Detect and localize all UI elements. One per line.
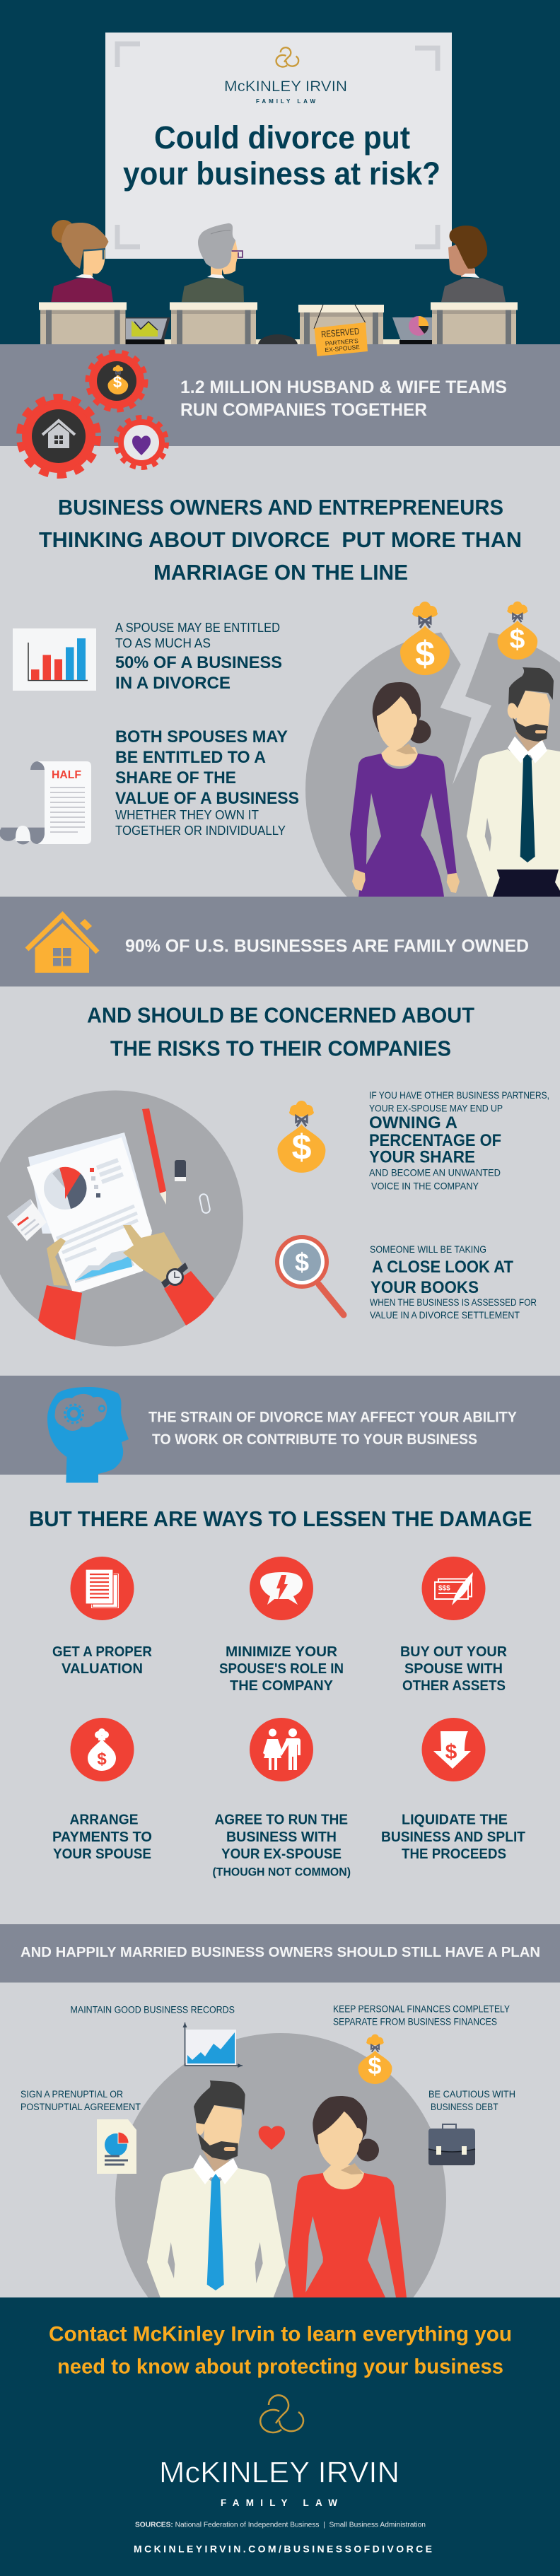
icon: growth chart — [182, 2022, 243, 2068]
item: buy out spouse: SPOUSE WITH — [404, 1661, 503, 1677]
text: both spouses: BE ENTITLED TO A — [115, 748, 266, 767]
call to action: Contact McKinley Irvin to learn everything you — [49, 2323, 512, 2346]
title: Could divorce put — [154, 119, 410, 156]
woman in purple dress — [350, 682, 460, 897]
item: run business with ex-spouse: (THOUGH NOT COMMON) — [212, 1865, 351, 1879]
text: plan labels: BUSINESS DEBT — [431, 2102, 498, 2112]
icon: money bag — [358, 2035, 392, 2084]
footer — [0, 2297, 560, 2576]
icon: documents — [71, 1557, 134, 1620]
item: minimize spouse's role: MINIMIZE YOUR — [226, 1644, 338, 1660]
icon: money bag: $ — [292, 1128, 312, 1167]
item: run business with ex-spouse — [212, 1718, 351, 1879]
gear: heart — [117, 418, 166, 467]
icon: briefcase — [428, 2124, 475, 2165]
logo wordmark: FAMILY LAW — [256, 98, 315, 105]
item: arrange payments — [52, 1718, 152, 1862]
band: husband and wife teams: RUN COMPANIES TOGETHER — [180, 400, 427, 420]
text: owning a percentage: OWNING A — [369, 1113, 457, 1132]
text: 50% of a business: A SPOUSE MAY BE ENTITLED — [115, 621, 280, 635]
text: close look at your books: VALUE IN A DIVORCE SETTLEMENT — [370, 1309, 520, 1321]
watch — [161, 1263, 188, 1288]
icon: half scroll document — [0, 761, 91, 844]
back paper — [28, 1132, 152, 1234]
item: liquidate business: LIQUIDATE THE — [402, 1813, 508, 1828]
text: owning a percentage — [369, 1089, 549, 1192]
text: close look at your books — [370, 1243, 537, 1321]
logo wordmark: McKINLEY IRVIN — [224, 78, 347, 95]
item: arrange payments: ARRANGE — [69, 1813, 139, 1828]
icon: money bag right: $ — [510, 624, 525, 655]
chair 3: reserved — [298, 305, 384, 345]
band: husband and wife teams — [0, 344, 560, 446]
icon: magnifying glass — [275, 1235, 344, 1315]
laptop with line chart — [125, 317, 170, 345]
left hand — [47, 1238, 68, 1286]
conference phone — [258, 334, 298, 345]
title: your business at risk? — [123, 156, 441, 192]
item: minimize spouse's role — [219, 1557, 344, 1694]
right hand — [123, 1225, 182, 1283]
text: owning a percentage: YOUR EX-SPOUSE MAY END UP — [369, 1103, 503, 1114]
icon: cheque and pen: $$$ — [438, 1585, 450, 1592]
left sleeve — [38, 1285, 82, 1340]
text: owning a percentage: VOICE IN THE COMPANY — [371, 1181, 479, 1192]
logo: McKinley Irvin mark — [276, 47, 298, 67]
heading: risks to their companies: THE RISKS TO THEIR COMPANIES — [110, 1036, 451, 1060]
item: run business with ex-spouse: YOUR EX-SPOUSE — [221, 1846, 342, 1862]
chair 2 — [170, 303, 257, 345]
text: plan labels: SIGN A PRENUPTIAL OR — [21, 2089, 123, 2100]
chair 1 — [39, 303, 127, 345]
woman in red dress — [288, 2096, 407, 2297]
heading: risks to their companies — [87, 1002, 474, 1060]
text: both spouses: VALUE OF A BUSINESS — [115, 789, 299, 808]
sign: reserved for partner's ex-spouse: RESERVED — [321, 326, 360, 339]
logo wordmark: FAMILY LAW — [221, 2498, 337, 2508]
text: both spouses: BOTH SPOUSES MAY — [115, 727, 288, 747]
crack — [437, 626, 491, 785]
heading: business owners: THINKING ABOUT DIVORCE PUT MORE THAN — [39, 527, 522, 552]
text: 50% of a business: IN A DIVORCE — [115, 674, 231, 693]
icon: half scroll document: HALF — [52, 769, 81, 781]
logo wordmark — [159, 2456, 399, 2508]
gear: house — [21, 398, 97, 474]
item: minimize spouse's role: SPOUSE'S ROLE IN — [219, 1661, 344, 1677]
icon: money bag right — [498, 602, 537, 660]
call to action — [49, 2323, 512, 2378]
sign: reserved for partner's ex-spouse: PARTNER'S — [325, 337, 359, 347]
icon: bar chart card — [13, 628, 96, 691]
icon: yellow house — [27, 915, 98, 973]
website url: MCKINLEYIRVIN.COM/BUSINESSOFDIVORCE — [134, 2543, 432, 2555]
band: 90 percent family owned — [0, 896, 560, 987]
person: woman with bun — [51, 220, 113, 302]
sources: SOURCES: National Federation of Independent Business | Small Business Administration — [135, 2521, 426, 2529]
text: close look at your books: A CLOSE LOOK AT — [372, 1258, 513, 1277]
laptop with pie chart — [392, 316, 432, 345]
item: arrange payments: YOUR SPOUSE — [53, 1846, 151, 1862]
text: plan labels: POSTNUPTIAL AGREEMENT — [21, 2102, 141, 2112]
icon: dollar with down arrow — [421, 1718, 485, 1781]
band: strain of divorce — [0, 1376, 560, 1483]
projection screen — [105, 33, 452, 259]
icon: cheque and pen — [421, 1557, 485, 1620]
chair 4 — [431, 303, 518, 345]
band: happily married owners: AND HAPPILY MARRIED BUSINESS OWNERS SHOULD STILL HAVE A PLAN — [21, 1945, 540, 1960]
text: close look at your books: SOMEONE WILL BE TAKING — [370, 1243, 486, 1255]
man in shirt and tie — [467, 667, 560, 897]
item: run business with ex-spouse: AGREE TO RUN THE — [215, 1813, 348, 1828]
item: buy out spouse — [400, 1557, 508, 1694]
band: strain of divorce: TO WORK OR CONTRIBUTE TO YOUR BUSINESS — [152, 1431, 477, 1448]
item: arrange payments: PAYMENTS TO — [52, 1829, 152, 1845]
pen — [142, 1108, 166, 1193]
text: owning a percentage: PERCENTAGE OF — [369, 1131, 501, 1150]
icon: money bag left: $ — [415, 634, 435, 674]
text: 50% of a business: TO AS MUCH AS — [115, 636, 211, 650]
sign: reserved for partner's ex-spouse — [314, 305, 368, 356]
item: buy out spouse: OTHER ASSETS — [402, 1678, 506, 1694]
icon: prenup document — [97, 2119, 136, 2174]
title — [123, 119, 441, 192]
gear: money — [88, 353, 145, 409]
heading: risks to their companies: AND SHOULD BE CONCERNED ABOUT — [87, 1002, 474, 1028]
pie chart — [44, 1167, 87, 1210]
area chart — [75, 1250, 134, 1283]
band: 90 percent family owned: 90% OF U.S. BUSINESSES ARE FAMILY OWNED — [125, 936, 529, 956]
item: proper valuation — [52, 1557, 153, 1677]
text: plan labels: SEPARATE FROM BUSINESS FINANCES — [333, 2016, 497, 2027]
logo wordmark — [224, 78, 347, 105]
icon: money bag: $ — [368, 2053, 382, 2080]
icon: speech bubble with lightning — [250, 1557, 313, 1620]
icon: dollar with down arrow: $ — [445, 1740, 457, 1764]
text: both spouses — [115, 727, 299, 838]
item: liquidate business — [381, 1718, 525, 1862]
icon: money bag — [277, 1101, 325, 1173]
gears — [21, 353, 166, 474]
item: liquidate business: BUSINESS AND SPLIT — [381, 1829, 525, 1845]
heading: business owners: MARRIAGE ON THE LINE — [153, 560, 408, 585]
person: brown-haired man — [441, 226, 506, 302]
illustration: divorcing couple — [305, 602, 560, 949]
logo: McKinley Irvin mark — [260, 2395, 303, 2432]
item: proper valuation: GET A PROPER — [52, 1644, 153, 1660]
front paper — [27, 1137, 152, 1294]
text: 50% of a business: 50% OF A BUSINESS — [115, 653, 282, 672]
illustration: desk with documents — [0, 1090, 243, 1346]
text: plan labels: KEEP PERSONAL FINANCES COMPLETELY — [333, 2003, 510, 2015]
text: both spouses: SHARE OF THE — [115, 768, 236, 788]
hero section — [0, 0, 560, 345]
heading: business owners: BUSINESS OWNERS AND ENTREPRENEURS — [58, 495, 503, 520]
legend — [90, 1168, 94, 1172]
text: both spouses: TOGETHER OR INDIVIDUALLY — [115, 824, 286, 838]
item: buy out spouse: BUY OUT YOUR — [400, 1644, 508, 1660]
note card — [7, 1199, 47, 1241]
text: both spouses: WHETHER THEY OWN IT — [115, 808, 259, 822]
text: owning a percentage: AND BECOME AN UNWANTED — [369, 1166, 501, 1178]
sign: reserved for partner's ex-spouse: EX-SPOUSE — [325, 344, 361, 353]
band: husband and wife teams: 1.2 MILLION HUSBAND & WIFE TEAMS — [180, 377, 507, 397]
man in shirt and blue tie — [147, 2080, 286, 2297]
gear: money: $ — [113, 373, 122, 391]
item: liquidate business: THE PROCEEDS — [402, 1846, 506, 1862]
item: minimize spouse's role: THE COMPANY — [230, 1678, 334, 1694]
right sleeve — [164, 1271, 214, 1325]
text: plan labels: BE CAUTIOUS WITH — [428, 2089, 515, 2100]
call to action: need to know about protecting your business — [57, 2355, 503, 2378]
text: plan labels: MAINTAIN GOOD BUSINESS RECORDS — [71, 2005, 235, 2015]
text: owning a percentage: YOUR SHARE — [369, 1148, 475, 1166]
heading: business owners — [39, 495, 522, 585]
heading: ways to lessen the damage: BUT THERE ARE WAYS TO LESSEN THE DAMAGE — [29, 1506, 532, 1531]
table — [164, 339, 400, 345]
logo wordmark: McKINLEY IRVIN — [159, 2456, 399, 2488]
icon: couple holding hands — [250, 1718, 313, 1781]
paperclip — [199, 1193, 211, 1214]
eraser — [175, 1160, 186, 1181]
band: strain of divorce: THE STRAIN OF DIVORCE MAY AFFECT YOUR ABILITY — [148, 1408, 517, 1425]
item: run business with ex-spouse: BUSINESS WITH — [226, 1829, 337, 1845]
band: happily married owners — [0, 1924, 560, 1982]
text: plan labels — [21, 2003, 515, 2112]
person: grey-haired man — [182, 223, 244, 302]
icon: money bag left — [400, 602, 450, 675]
icon: heart — [259, 2126, 285, 2150]
illustration: happy couple — [97, 2022, 475, 2364]
icon: magnifying glass: $ — [295, 1248, 309, 1277]
item: proper valuation: VALUATION — [62, 1661, 143, 1677]
icon: white money bag: $ — [97, 1750, 107, 1769]
text: close look at your books: YOUR BOOKS — [371, 1278, 479, 1297]
icon: head with gears — [47, 1387, 129, 1483]
text: 50% of a business — [115, 621, 282, 693]
icon: white money bag — [71, 1718, 134, 1781]
